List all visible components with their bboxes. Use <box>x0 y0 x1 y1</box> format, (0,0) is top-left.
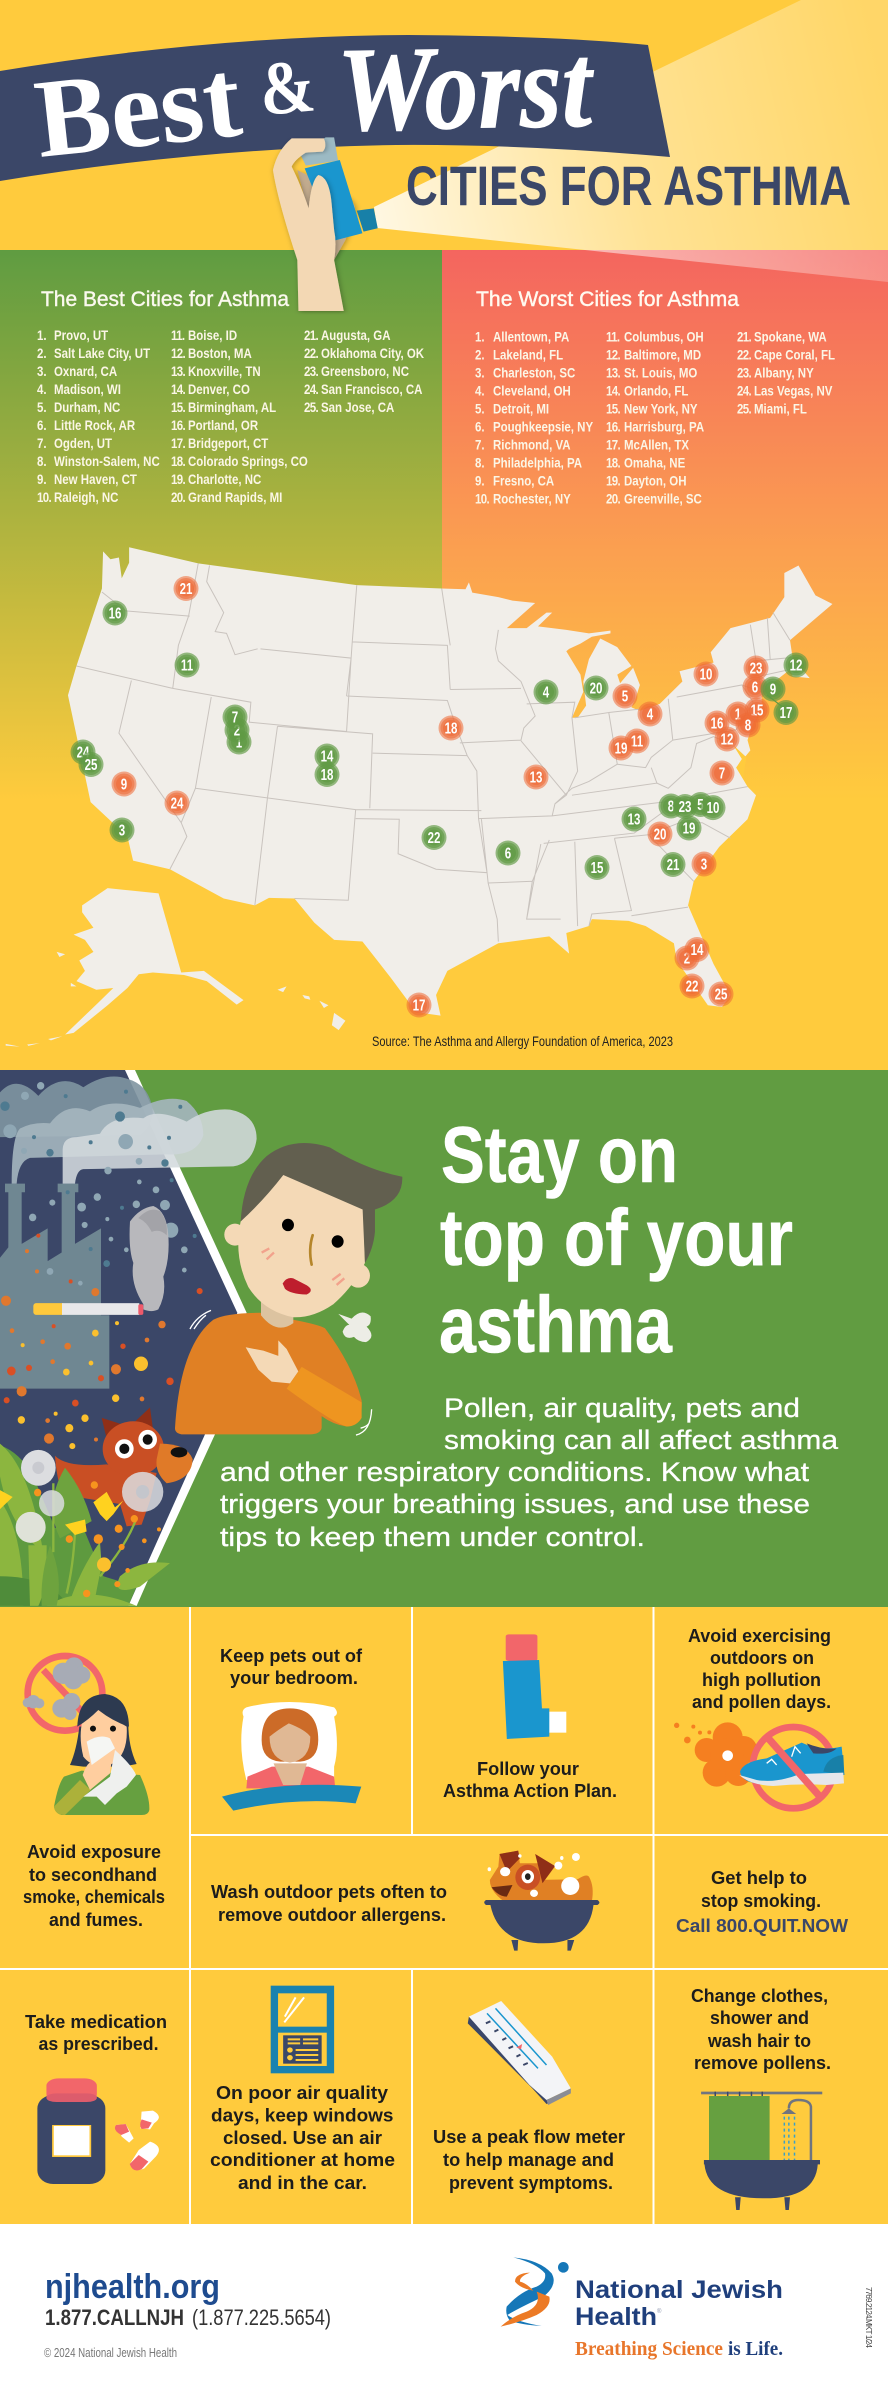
map markers: worst cities: 13 <box>530 768 543 786</box>
panel: tips grid <box>0 1607 888 2224</box>
logo name: ® <box>657 2308 662 2315</box>
map markers: worst cities: 9 <box>121 775 127 793</box>
tip text: conditioner at home <box>210 2149 395 2170</box>
list: worst cities: Charleston, SC <box>493 364 575 381</box>
list: best cities: Winston-Salem, NC <box>54 453 160 469</box>
list: worst cities: New York, NY <box>624 400 698 417</box>
tip: stop smoking: Call 800.QUIT.NOW <box>676 1915 849 1936</box>
tip: avoid exercising outdoors <box>674 1625 844 1808</box>
list: worst cities: Poughkeepsie, NY <box>493 418 594 435</box>
list: worst cities: 14. <box>606 382 620 399</box>
tip text: Use a peak flow meter <box>433 2126 625 2147</box>
list: best cities: Oklahoma City, OK <box>321 345 425 361</box>
map markers: best cities: 20 <box>590 679 603 697</box>
list: best cities: 14. <box>171 381 185 397</box>
intro paragraph: smoking can all affect asthma <box>444 1425 839 1455</box>
map markers: worst cities: 20 <box>654 825 667 843</box>
list: worst cities: 4. <box>475 382 485 399</box>
list: best cities: 21. <box>304 327 318 343</box>
map markers: best cities: 7 <box>232 708 238 726</box>
intro paragraph: triggers your breathing issues, and use these <box>220 1489 810 1519</box>
map markers: worst cities: 17 <box>413 996 426 1014</box>
list: worst cities: Dayton, OH <box>624 472 686 489</box>
list: best cities: 3. <box>37 363 47 379</box>
list: best cities: 10. <box>37 489 51 505</box>
list: best cities: Provo, UT <box>54 327 108 343</box>
list: worst cities: 2. <box>475 346 485 363</box>
list: worst cities: Lakeland, FL <box>493 346 563 363</box>
white divider shape <box>125 1070 247 1606</box>
list: best cities: Durham, NC <box>54 399 120 415</box>
tip: change clothes <box>691 1985 831 2210</box>
list: worst cities: 7. <box>475 436 485 453</box>
heading: stay on top of your asthma: Stay on <box>441 1110 678 1199</box>
tip text: and fumes. <box>49 1909 143 1930</box>
map markers: worst cities: 14 <box>691 940 704 958</box>
tip text: to help manage and <box>443 2149 614 2170</box>
map markers: worst cities: 2 <box>684 949 690 967</box>
tip text: and in the car. <box>238 2172 367 2193</box>
panel: best cities background <box>0 250 442 1070</box>
map markers: best cities: 22 <box>428 828 441 846</box>
tip text: wash hair to <box>707 2030 811 2051</box>
Alaska <box>6 888 244 1047</box>
tip: stop smoking: Get help to <box>711 1867 807 1888</box>
list: worst cities: Baltimore, MD <box>624 346 701 363</box>
map markers: worst cities: 3 <box>701 855 707 873</box>
panel: stay on top background <box>0 1070 888 1607</box>
tip text <box>433 2126 625 2193</box>
map markers: best cities: 13 <box>628 810 641 828</box>
map markers: best cities: 10 <box>707 798 720 817</box>
logo name: National Jewish <box>575 2276 783 2304</box>
tip text <box>691 1985 831 2073</box>
icon: dog in bathtub <box>484 1851 599 1951</box>
map markers: worst cities: 21 <box>180 579 193 597</box>
tip text: outdoors on <box>710 1647 814 1668</box>
list: worst cities: 11. <box>606 328 620 345</box>
icon: woman with tissue and no-smoke sign <box>23 1656 149 1815</box>
tip text <box>211 1881 447 1925</box>
list: best cities: 9. <box>37 471 47 487</box>
list: best cities: 6. <box>37 417 47 433</box>
list: best cities: 25. <box>304 399 318 415</box>
map markers: worst cities: 16 <box>711 714 724 732</box>
list: best cities: 18. <box>171 453 185 469</box>
list: worst cities: Harrisburg, PA <box>624 418 704 435</box>
map markers: worst cities: 7 <box>719 764 725 782</box>
tip text <box>25 2011 167 2054</box>
map markers: worst cities: 10 <box>700 665 713 683</box>
cigarette with smoke <box>33 1206 169 1315</box>
map markers: best cities <box>70 600 808 880</box>
list: best cities: San Francisco, CA <box>321 381 422 397</box>
list: best cities: 22. <box>304 345 318 361</box>
tip text <box>23 1841 165 1930</box>
dandelions and leaves <box>0 1444 170 1606</box>
list: best cities: San Jose, CA <box>321 399 394 415</box>
list: worst cities: Spokane, WA <box>754 328 827 345</box>
title word: Best: Best <box>29 36 247 182</box>
map markers: best cities: 17 <box>780 703 793 721</box>
phone number: 1.877.CALLNJH <box>45 2305 184 2330</box>
print code: 7769.2124.MKT 1/24 <box>864 2287 873 2349</box>
illustration: triggers and person <box>0 1070 402 1606</box>
list: best cities: Charlotte, NC <box>188 471 261 487</box>
map of the United States <box>6 547 832 1047</box>
list: worst cities: 8. <box>475 454 485 471</box>
tip text <box>688 1625 831 1712</box>
map markers: worst cities: 6 <box>752 678 758 696</box>
list: best cities: Portland, OR <box>188 417 258 433</box>
map markers: best cities: 5 <box>697 795 704 813</box>
tagline: Breathing Science <box>575 2338 723 2360</box>
map markers: best cities: 24 <box>77 743 90 761</box>
tip text: your bedroom. <box>230 1667 358 1688</box>
list: best cities: Knoxville, TN <box>188 363 261 379</box>
title word: Worst: Worst <box>336 19 596 156</box>
list: best cities: 4. <box>37 381 47 397</box>
map markers: worst cities: 23 <box>750 659 763 677</box>
map markers: best cities: 6 <box>505 844 511 862</box>
list: best cities: Birmingham, AL <box>188 399 276 415</box>
logo mark <box>501 2257 569 2327</box>
icon: hand holding inhaler <box>273 137 378 311</box>
list: worst cities: Greenville, SC <box>624 490 702 507</box>
factory <box>0 1184 109 1389</box>
list: best cities: Raleigh, NC <box>54 489 118 505</box>
state borders <box>76 563 793 942</box>
person holding chest <box>175 1143 402 1435</box>
phone number digits: (1.877.225.5654) <box>192 2305 331 2330</box>
tip text: to secondhand <box>29 1864 157 1885</box>
list: worst cities: Richmond, VA <box>493 436 571 453</box>
tip: wash outdoor pets <box>211 1851 599 1951</box>
tip text: Take medication <box>25 2011 167 2032</box>
map markers: worst cities: 5 <box>622 687 628 705</box>
list: best cities: 13. <box>171 363 185 379</box>
list: worst cities: 12. <box>606 346 620 363</box>
heading: best cities: The Best Cities for Asthma <box>41 288 289 311</box>
list: best cities: Denver, CO <box>188 381 250 397</box>
list: best cities: Colorado Springs, CO <box>188 453 308 469</box>
list: best cities: 5. <box>37 399 47 415</box>
list: worst cities: 17. <box>606 436 620 453</box>
pollution particles <box>0 1082 203 1449</box>
map markers: best cities: 25 <box>85 755 98 773</box>
tip: take medication <box>25 2011 167 2184</box>
list: worst cities: McAllen, TX <box>624 436 689 453</box>
list: best cities: 20. <box>171 489 185 505</box>
list: worst cities: 20. <box>606 490 620 507</box>
tip text: remove pollens. <box>694 2052 831 2073</box>
list: worst cities: 1. <box>475 328 485 345</box>
list: best cities: Augusta, GA <box>321 327 390 343</box>
Chesapeake Bay <box>733 745 746 778</box>
list: best cities: Greensboro, NC <box>321 363 409 379</box>
list: worst cities: 3. <box>475 364 485 381</box>
tip text: Change clothes, <box>691 1985 828 2006</box>
Hawaii <box>277 986 345 1030</box>
tip: peak flow meter <box>433 2001 625 2193</box>
list: best cities: New Haven, CT <box>54 471 137 487</box>
list: worst cities: Orlando, FL <box>624 382 689 399</box>
navy triggers background <box>0 1070 237 1606</box>
copyright: © 2024 National Jewish Health <box>44 2345 177 2360</box>
tip text: Avoid exercising <box>688 1625 831 1646</box>
icon: person sleeping <box>222 1702 361 1811</box>
list: best cities: Boise, ID <box>188 327 237 343</box>
map markers: worst cities: 25 <box>715 985 728 1003</box>
heading: stay on top of your asthma: top of your <box>440 1193 793 1282</box>
list: worst cities: 24. <box>737 382 751 399</box>
list: worst cities: Philadelphia, PA <box>493 454 582 471</box>
list: worst cities: 18. <box>606 454 620 471</box>
map markers: worst cities: 1 <box>735 705 741 723</box>
list: worst cities: Las Vegas, NV <box>754 382 833 399</box>
list: best cities: 7. <box>37 435 47 451</box>
map markers: worst cities: 11 <box>631 732 643 750</box>
list: best cities: 19. <box>171 471 185 487</box>
banner <box>0 35 670 181</box>
source note: Source: The Asthma and Allergy Foundation of America, 2023 <box>372 1033 673 1049</box>
tip text: prevent symptoms. <box>449 2172 613 2193</box>
list: worst cities: Cape Coral, FL <box>754 346 835 363</box>
icon: flower and shoe with no sign <box>674 1722 844 1808</box>
tip: stop smoking: stop smoking. <box>701 1890 821 1911</box>
list: worst cities: 13. <box>606 364 620 381</box>
list: worst cities: Omaha, NE <box>624 454 686 471</box>
map markers: best cities: 11 <box>181 656 193 674</box>
list: best cities: 11. <box>171 327 185 343</box>
list: best cities: 16. <box>171 417 185 433</box>
list: best cities: 8. <box>37 453 47 469</box>
map markers: best cities: 21 <box>667 855 680 873</box>
map markers: best cities: 14 <box>321 747 334 765</box>
list: worst cities: 25. <box>737 400 751 417</box>
icon: shower and bathtub <box>701 2092 822 2210</box>
list: best cities: Salt Lake City, UT <box>54 345 150 361</box>
list: worst cities: Rochester, NY <box>493 490 571 507</box>
map markers: best cities: 12 <box>790 656 803 674</box>
tip text <box>210 2082 395 2193</box>
list: worst cities: 19. <box>606 472 620 489</box>
tip text <box>220 1645 363 1688</box>
tip: asthma action plan <box>443 1634 617 1801</box>
map markers: worst cities: 4 <box>647 705 653 723</box>
map markers: worst cities: 18 <box>445 719 458 737</box>
list: best cities <box>37 327 425 505</box>
list: worst cities: 5. <box>475 400 485 417</box>
map markers: best cities: 2 <box>234 721 240 739</box>
list: worst cities: St. Louis, MO <box>624 364 697 381</box>
tip text: Keep pets out of <box>220 1645 363 1666</box>
title word: and: & <box>256 43 318 132</box>
list: worst cities: 15. <box>606 400 620 417</box>
logo name <box>575 2276 783 2331</box>
list: best cities: Grand Rapids, MI <box>188 489 282 505</box>
contiguous states outline <box>68 547 832 1016</box>
tip text: Wash outdoor pets often to <box>211 1881 447 1902</box>
map markers: best cities: 18 <box>321 765 334 783</box>
map markers: worst cities: 22 <box>686 977 699 995</box>
tip: stop smoking <box>676 1867 849 1936</box>
list: worst cities: 21. <box>737 328 751 345</box>
intro paragraph: Pollen, air quality, pets and <box>444 1393 800 1423</box>
map markers: worst cities: 8 <box>745 716 751 734</box>
tip text: shower and <box>710 2007 809 2028</box>
list: worst cities: Miami, FL <box>754 400 807 417</box>
title <box>29 19 851 217</box>
logo name: Health <box>575 2303 657 2331</box>
intro paragraph <box>220 1393 839 1552</box>
map markers: worst cities: 15 <box>751 701 764 719</box>
list: best cities: Madison, WI <box>54 381 121 397</box>
tip text: Avoid exposure <box>27 1841 161 1862</box>
map markers: best cities: 19 <box>683 819 696 837</box>
map markers: best cities: 9 <box>770 680 776 698</box>
tip text: as prescribed. <box>38 2033 158 2054</box>
map markers: best cities: 3 <box>119 821 125 839</box>
list: best cities: 2. <box>37 345 47 361</box>
list: best cities: Ogden, UT <box>54 435 112 451</box>
list: worst cities: 16. <box>606 418 620 435</box>
intro paragraph: tips to keep them under control. <box>220 1522 645 1552</box>
footer <box>0 2224 888 2388</box>
map markers: best cities: 8 <box>668 797 674 815</box>
tip text: Asthma Action Plan. <box>443 1780 617 1801</box>
icon: medication bottle and pills <box>37 2078 159 2184</box>
tip text: days, keep windows <box>211 2104 394 2126</box>
map markers: worst cities: 24 <box>171 794 184 812</box>
dog <box>55 1408 193 1530</box>
tip text: high pollution <box>702 1669 821 1690</box>
smoke clouds <box>0 1076 257 1184</box>
tip: poor air quality days <box>210 1986 395 2193</box>
tip text: closed. Use an air <box>223 2127 382 2148</box>
map markers: best cities: 4 <box>543 683 549 701</box>
tip text: remove outdoor allergens. <box>218 1904 446 1925</box>
website: njhealth.org <box>45 2268 220 2306</box>
tip: keep pets out of bedroom <box>220 1645 363 1811</box>
tip text <box>443 1758 617 1801</box>
icon: window with air conditioner <box>271 1986 334 2073</box>
list: best cities: 12. <box>171 345 185 361</box>
list: best cities: 1. <box>37 327 47 343</box>
intro paragraph: and other respiratory conditions. Know what <box>220 1457 810 1487</box>
heading: stay on top of your asthma <box>439 1110 793 1369</box>
list: worst cities: 6. <box>475 418 485 435</box>
list: best cities: Bridgeport, CT <box>188 435 268 451</box>
icon: blue inhaler <box>503 1634 566 1739</box>
heading: stay on top of your asthma: asthma <box>439 1280 672 1369</box>
map markers: worst cities <box>112 576 770 1018</box>
list: worst cities: 10. <box>475 490 489 507</box>
list: worst cities: Albany, NY <box>754 364 814 381</box>
icon: peak flow meter <box>468 2001 571 2105</box>
panel: worst cities background <box>442 250 888 1070</box>
list: worst cities: Columbus, OH <box>624 328 704 345</box>
list: best cities: Little Rock, AR <box>54 417 135 433</box>
tagline: is Life. <box>728 2338 783 2360</box>
list: best cities: 17. <box>171 435 185 451</box>
list: worst cities: Cleveland, OH <box>493 382 571 399</box>
map markers: best cities: 23 <box>679 797 692 815</box>
list: best cities: Oxnard, CA <box>54 363 117 379</box>
tip text: On poor air quality <box>216 2082 389 2103</box>
list: worst cities <box>475 328 835 507</box>
list: worst cities: 23. <box>737 364 751 381</box>
list: worst cities: 9. <box>475 472 485 489</box>
tip: avoid exposure <box>23 1656 165 1930</box>
map markers: worst cities: 12 <box>721 730 734 748</box>
map markers: worst cities: 19 <box>615 739 628 757</box>
tip text: smoke, chemicals <box>23 1886 165 1907</box>
heading: worst cities: The Worst Cities for Asthma <box>476 288 739 311</box>
list: best cities: 15. <box>171 399 185 415</box>
map markers: best cities: 1 <box>236 733 242 751</box>
tip text: and pollen days. <box>692 1691 831 1712</box>
tip text: Follow your <box>477 1758 579 1779</box>
light beam from inhaler <box>374 0 888 282</box>
list: best cities: Boston, MA <box>188 345 252 361</box>
list: worst cities: Detroit, MI <box>493 400 549 417</box>
list: worst cities: 22. <box>737 346 751 363</box>
list: worst cities: Allentown, PA <box>493 328 569 345</box>
list: worst cities: Fresno, CA <box>493 472 554 489</box>
list: best cities: 23. <box>304 363 318 379</box>
map markers: best cities: 15 <box>591 858 604 876</box>
map markers: best cities: 16 <box>109 604 122 622</box>
list: best cities: 24. <box>304 381 318 397</box>
